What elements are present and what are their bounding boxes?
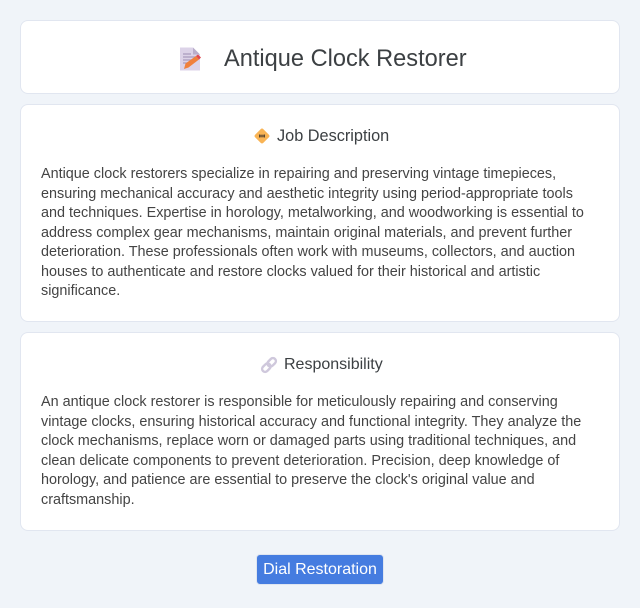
text: job description: Antique clock restorers specialize in repairing and preserving vintage timepieces,: [41, 166, 556, 182]
text: responsibility: craftsmanship.: [41, 492, 135, 508]
text: job description: and techniques. Expertise in horology, metalworking, and woodworking is essential to: [41, 205, 584, 221]
heading: job description: Job Description: [277, 127, 389, 145]
text: job description: houses to authenticate and restore clocks valued for their historical and artistic: [41, 264, 540, 280]
text: responsibility: clock mechanisms, replace worn or damaged parts using traditional techniques, and: [41, 433, 576, 449]
button: Dial Restoration: Dial Restoration: [263, 561, 377, 578]
button: Dial Restoration: [256, 554, 384, 585]
icon: chain link: [261, 356, 277, 374]
text: responsibility: [41, 394, 581, 508]
text: job description: address complex gear mechanisms, maintain original materials, and prevent further: [41, 224, 572, 240]
text: responsibility: clean delicate components to prevent deterioration. Precision, deep knowledge of: [41, 452, 559, 468]
text: responsibility: vintage clocks, ensuring historical accuracy and functional integrity. They analyze the: [41, 414, 581, 430]
heading: responsibility: Responsibility: [284, 356, 383, 373]
panel: responsibility: [20, 332, 620, 531]
text: job description: significance.: [41, 283, 120, 299]
text: job description: deterioration. These professionals often work with museums, collectors, and auction: [41, 244, 575, 260]
panel: title card: [20, 20, 620, 94]
text: job description: [41, 166, 584, 299]
icon: document with pencil: [180, 48, 201, 70]
text: job description: ensuring mechanical accuracy and aesthetic integrity using period-appropriate tools: [41, 186, 573, 202]
text: responsibility: horology, and patience are essential to preserve the clock's original value and: [41, 472, 535, 488]
text: responsibility: An antique clock restorer is responsible for meticulously repairing and conserving: [41, 394, 558, 410]
icon: diamond road sign: [254, 128, 270, 144]
title: Antique Clock Restorer: [224, 46, 467, 72]
panel: job description: [20, 104, 620, 322]
